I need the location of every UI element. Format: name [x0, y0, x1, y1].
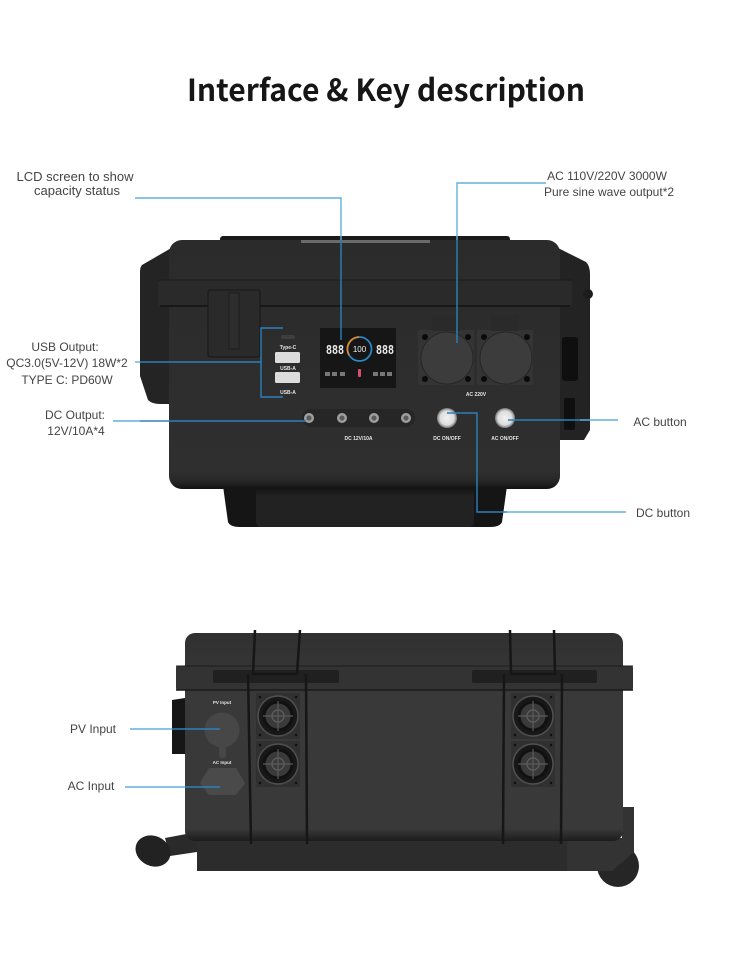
callout lines — [113, 183, 626, 787]
label: AC input: AC Input — [68, 779, 115, 793]
PV input: PV Input — [213, 700, 232, 705]
LCD screen: 888 — [326, 343, 344, 359]
side connector — [172, 698, 185, 754]
base frame — [197, 838, 567, 871]
case body — [185, 633, 623, 841]
AC input: AC Input — [213, 760, 232, 765]
LCD screen: 888 — [376, 343, 394, 359]
DC button label: DC ON/OFF — [433, 436, 461, 442]
lid strap — [176, 666, 633, 690]
label: AC output: Pure sine wave output*2 — [544, 185, 674, 199]
title: Interface & Key description — [187, 66, 585, 110]
handle flap — [208, 290, 260, 357]
lid top edge — [220, 236, 510, 244]
case body — [169, 240, 560, 489]
LCD screen: 100 — [353, 345, 367, 354]
strap recesses — [213, 670, 597, 683]
product: rear view of power station — [130, 630, 639, 887]
fans — [256, 693, 555, 787]
label: USB output: QC3.0(5V-12V) 18W*2 — [6, 356, 128, 370]
carry handle — [223, 486, 507, 527]
label: DC output: DC Output: — [45, 408, 105, 422]
DC button — [437, 408, 457, 428]
label: USB output: TYPE C: PD60W — [21, 373, 113, 387]
AC button label: AC ON/OFF — [491, 436, 519, 442]
label: AC button: AC button — [633, 415, 687, 429]
AC 220V label: AC 220V — [466, 392, 487, 398]
left side ear — [140, 247, 175, 404]
label: PV input: PV Input — [70, 722, 117, 736]
latch straps — [248, 630, 562, 844]
DC label: DC 12V/10A — [344, 436, 373, 442]
label: DC button: DC button — [636, 506, 690, 520]
right frame upright — [565, 807, 634, 871]
USB ports: USB-A — [280, 366, 296, 372]
label: AC output: AC 110V/220V 3000W — [547, 169, 668, 183]
label: LCD screen: capacity status — [34, 183, 120, 198]
AC button — [495, 408, 515, 428]
right side ear — [556, 247, 590, 440]
label: LCD screen: LCD screen to show — [16, 169, 134, 184]
rear caster wheel — [130, 830, 197, 872]
USB ports: Type-C — [280, 345, 297, 351]
lid strap — [158, 280, 572, 306]
PV input — [204, 700, 240, 758]
right side connectors — [562, 337, 578, 430]
LCD screen — [320, 328, 396, 388]
USB ports — [275, 335, 300, 396]
AC input — [200, 760, 245, 795]
label: DC output: 12V/10A*4 — [47, 424, 105, 438]
DC ports strip — [302, 409, 415, 427]
product: front view of power station — [140, 236, 593, 527]
latch knob — [583, 289, 593, 299]
USB ports: USB-A — [280, 390, 296, 396]
front wheel — [597, 845, 639, 887]
label: USB output: USB Output: — [31, 340, 99, 354]
AC outlets — [418, 315, 533, 385]
